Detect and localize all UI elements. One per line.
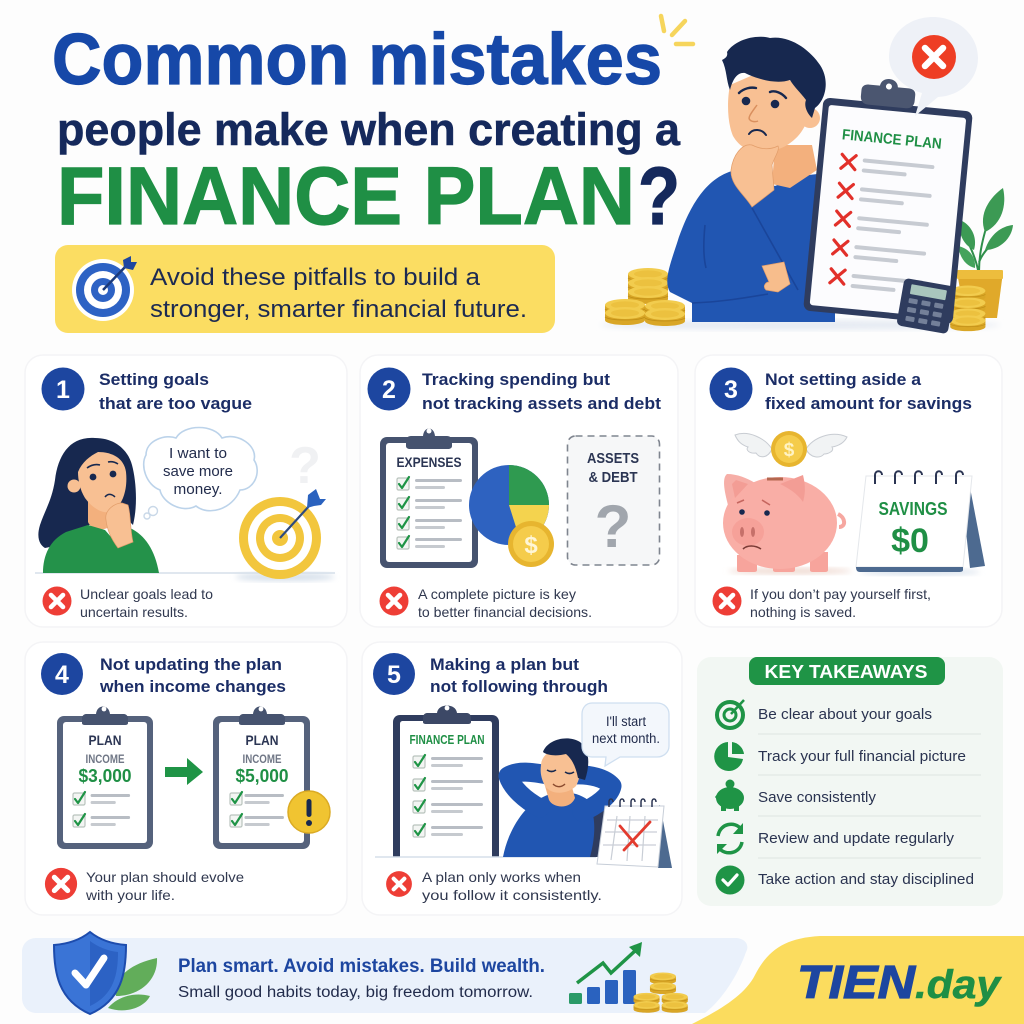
tagline: Plan smart. Avoid mistakes. Build wealth. — [178, 956, 545, 977]
title: FINANCE PLAN — [57, 151, 635, 242]
callout 3: nothing is saved. — [750, 604, 856, 620]
callout 4: with your life. — [85, 887, 175, 903]
dashed box: assets and debt — [568, 436, 660, 565]
number badge 3 — [710, 368, 752, 410]
callout 5 — [386, 869, 602, 903]
panel: mistake 5 — [362, 642, 682, 915]
takeaway 3 — [715, 780, 877, 811]
heading 3 — [765, 370, 972, 413]
callout 1: uncertain results. — [80, 604, 188, 620]
man head — [722, 37, 826, 207]
speech bubble: next month. — [592, 731, 660, 746]
heading 3: Not setting aside a — [765, 370, 922, 389]
number badge 1 — [42, 368, 84, 410]
takeaway 5: Take action and stay disciplined — [758, 872, 974, 888]
dashed box: assets and debt: ASSETS — [587, 451, 639, 467]
logo: .day — [915, 963, 1002, 1007]
panel: mistake 2 — [360, 355, 678, 627]
clipboard: plan $5,000: $5,000 — [236, 766, 288, 786]
calendar: savings $0: $0 — [891, 522, 929, 560]
arrow — [165, 758, 203, 785]
takeaway 3: Save consistently — [758, 790, 877, 806]
panel: key takeaways — [697, 657, 1003, 906]
subtitle banner — [55, 245, 555, 333]
heading 2 — [422, 370, 661, 413]
subtitle banner: stronger, smarter financial future. — [150, 296, 527, 323]
heading 5: Making a plan but — [430, 655, 579, 674]
calculator — [896, 278, 956, 334]
heading 1: Setting goals — [99, 370, 209, 389]
pie chart — [469, 465, 549, 545]
heading pill — [749, 657, 945, 685]
number badge 2 — [368, 368, 410, 410]
clipboard: plan $3,000: INCOME — [86, 754, 125, 766]
title — [52, 20, 681, 242]
icon: yellow spark lines — [661, 16, 693, 44]
clipboard: plan $5,000 — [213, 706, 310, 849]
coins left — [605, 268, 685, 326]
heading 3: fixed amount for savings — [765, 394, 972, 413]
tagline: Small good habits today, big freedom tomorrow. — [178, 984, 533, 1001]
number badge 5: 5 — [387, 661, 401, 689]
calendar: savings $0 — [856, 471, 985, 575]
ground shadow — [600, 320, 1000, 330]
callout 2 — [380, 586, 592, 620]
hand at chin — [731, 145, 778, 207]
clipboard: expenses: EXPENSES — [396, 454, 462, 470]
title: people make when creating a — [57, 104, 681, 155]
clipboard: plan $3,000: $3,000 — [78, 766, 132, 786]
heading pill: KEY TAKEAWAYS — [764, 662, 928, 682]
heading 2: not tracking assets and debt — [422, 394, 661, 413]
panel: mistake 3 — [695, 355, 1002, 627]
tagline — [178, 956, 545, 1001]
yellow corner with logo — [692, 936, 1024, 1024]
takeaway 5 — [716, 866, 974, 894]
clipboard: plan $3,000 — [57, 706, 153, 849]
title: Common mistakes — [52, 20, 662, 100]
question mark: ? — [289, 437, 321, 495]
bottom banner — [22, 932, 747, 1014]
dashed box: assets and debt: ? — [595, 493, 631, 560]
number badge 4 — [41, 653, 83, 695]
calendar with red x — [597, 799, 672, 868]
plant — [957, 188, 1013, 318]
callout 4: Your plan should evolve — [86, 869, 244, 885]
icon: winged coin: $ — [784, 440, 795, 461]
number badge 1: 1 — [56, 376, 70, 404]
icon: banner target — [72, 256, 137, 321]
clipboard — [803, 73, 975, 325]
callout 4 — [45, 868, 244, 903]
callout 2: A complete picture is key — [418, 586, 576, 602]
panel: mistake 1 — [25, 355, 347, 627]
takeaway 1: Be clear about your goals — [758, 707, 932, 723]
dashed box: assets and debt: & DEBT — [588, 470, 638, 486]
heading 5 — [430, 655, 608, 696]
number badge 5 — [373, 653, 415, 695]
panel: mistake 4 — [25, 642, 347, 915]
clipboard: plan $5,000: INCOME — [242, 754, 282, 766]
takeaway 4: Review and update regularly — [758, 831, 955, 847]
clipboard: expenses — [380, 428, 478, 568]
illustration: thinking man with finance plan clipboard — [600, 17, 1013, 334]
thought bubble — [144, 428, 257, 519]
takeaway 4 — [717, 823, 955, 854]
clipboard: finance plan — [393, 706, 499, 857]
speech bubble — [582, 703, 669, 766]
calendar: savings $0: SAVINGS — [878, 499, 948, 519]
clipboard: finance plan: FINANCE PLAN — [410, 733, 484, 747]
heading 1: that are too vague — [99, 394, 252, 413]
coins right — [950, 286, 985, 331]
thought bubble: money. — [174, 482, 222, 498]
relaxing man — [375, 738, 612, 857]
clipboard: plan $5,000: PLAN — [246, 732, 278, 748]
heading 1 — [99, 370, 252, 413]
icon: dollar coin: $ — [524, 532, 538, 559]
heading 4: when income changes — [99, 677, 286, 696]
callout 2: to better financial decisions. — [418, 604, 592, 620]
callout 5: you follow it consistently. — [422, 887, 602, 903]
callout 1: Unclear goals lead to — [80, 586, 213, 602]
heading 4 — [99, 655, 286, 696]
takeaway 2 — [714, 742, 966, 771]
logo — [797, 956, 1002, 1008]
callout 5: A plan only works when — [422, 869, 581, 885]
icon: warning coin — [288, 791, 330, 833]
callout 3 — [712, 586, 931, 620]
thought bubble: I want to — [169, 446, 227, 462]
speech bubble with x — [889, 17, 978, 116]
heading 2: Tracking spending but — [422, 370, 610, 389]
takeaway 2: Track your full financial picture — [758, 749, 966, 765]
number badge 3: 3 — [724, 376, 738, 404]
logo: TIEN — [797, 956, 916, 1008]
thought bubble: save more — [163, 464, 233, 480]
subtitle banner: Avoid these pitfalls to build a — [150, 264, 481, 291]
heading 5: not following through — [430, 677, 608, 696]
number badge 4: 4 — [55, 661, 69, 689]
clipboard: FINANCE PLAN — [841, 126, 942, 153]
callout 3: If you don’t pay yourself first, — [750, 586, 931, 602]
icon: winged coin — [735, 431, 847, 467]
takeaway 1 — [717, 700, 932, 728]
speech bubble: I'll start — [606, 714, 646, 729]
clipboard: plan $3,000: PLAN — [88, 732, 122, 748]
heading 4: Not updating the plan — [100, 655, 282, 674]
man body — [667, 171, 835, 322]
icon: target with arrow — [235, 489, 335, 581]
title: ? — [638, 151, 680, 242]
icon: dollar coin — [508, 521, 554, 567]
illustration: worried woman — [35, 438, 335, 573]
number badge 2: 2 — [382, 376, 396, 404]
callout 1 — [42, 586, 213, 620]
icon: sad piggy bank — [723, 474, 852, 574]
icon: shield with leaves — [54, 932, 157, 1014]
chart: growth bars with coins — [569, 942, 688, 1013]
